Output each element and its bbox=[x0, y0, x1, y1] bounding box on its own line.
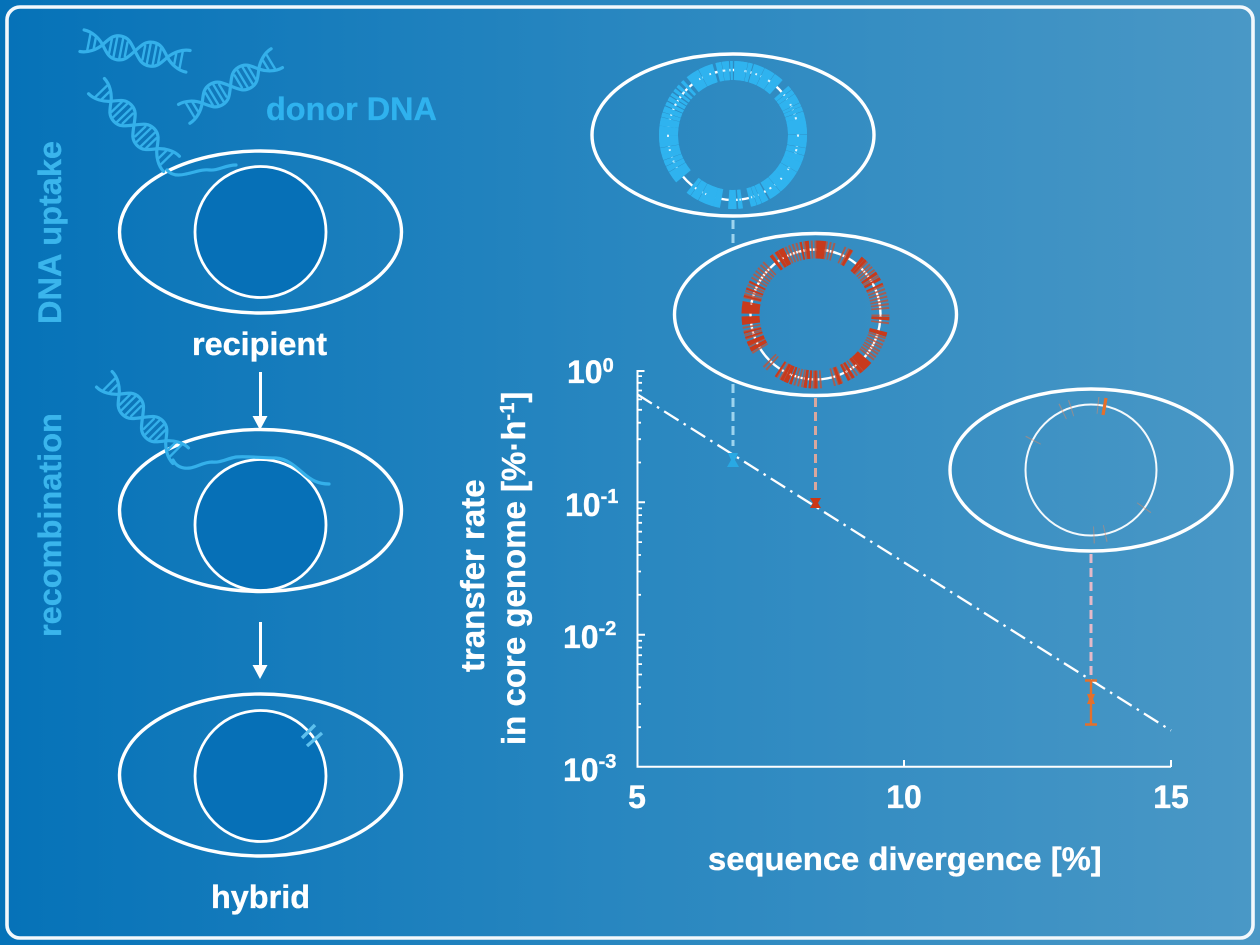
panel: hybrid stage bbox=[120, 694, 402, 915]
genome map: red, medium divergence bbox=[674, 234, 956, 396]
y-axis tick labels: 10 bbox=[563, 752, 599, 788]
genome map: blue, low divergence bbox=[592, 54, 874, 216]
y-axis tick labels: -2 bbox=[599, 618, 616, 640]
heading: donor DNA: donor DNA bbox=[266, 91, 437, 127]
y-axis tick labels: 0 bbox=[603, 355, 614, 377]
icon: donor DNA helix top bbox=[80, 29, 190, 73]
arrow: uptake to recombination bbox=[252, 372, 268, 430]
cell during recombination bbox=[120, 430, 402, 592]
panel: recombination stage bbox=[32, 371, 402, 637]
y-axis title: in core genome [%·h bbox=[495, 420, 532, 745]
hybrid cell bbox=[120, 694, 402, 856]
chart: transfer rate vs sequence divergence bbox=[454, 220, 1189, 877]
x-axis tick labels: 5 bbox=[628, 779, 646, 815]
y-axis title: ] bbox=[495, 392, 532, 403]
single-stranded DNA along chromosome bbox=[173, 457, 329, 484]
label: hybrid: hybrid bbox=[211, 879, 310, 915]
x-axis title: sequence divergence [%] bbox=[708, 840, 1102, 877]
y-axis title: -1 bbox=[497, 403, 519, 420]
y-axis tick labels: -3 bbox=[599, 751, 616, 773]
icon: DNA helix recombining bbox=[96, 371, 189, 464]
y-axis tick labels: -1 bbox=[601, 486, 618, 508]
y-axis tick labels: 10 bbox=[567, 354, 603, 390]
y-axis tick labels: 10 bbox=[563, 619, 599, 655]
label: recombination: recombination bbox=[32, 413, 68, 637]
y-axis title: transfer rate bbox=[454, 479, 491, 672]
label: recipient: recipient bbox=[192, 326, 327, 362]
recipient cell bbox=[120, 151, 402, 313]
drop lines to data points bbox=[733, 220, 1091, 678]
data point: blue bbox=[727, 453, 739, 467]
panel: DNA uptake stage bbox=[32, 29, 437, 362]
y-axis tick labels bbox=[563, 354, 618, 788]
y-axis title bbox=[454, 392, 532, 745]
icon: donor DNA helix right bbox=[178, 48, 283, 124]
genome map: orange, high divergence bbox=[950, 389, 1232, 551]
x-axis tick labels: 15 bbox=[1153, 779, 1189, 815]
integrated donor fragment bbox=[302, 725, 322, 746]
single-stranded donor DNA in cell bbox=[167, 165, 236, 175]
chart axes bbox=[637, 371, 1171, 767]
fit line bbox=[638, 394, 1171, 730]
data point: orange with error bars bbox=[1085, 680, 1097, 724]
data point: red bbox=[810, 498, 821, 508]
icon: donor DNA helix entering cell bbox=[88, 78, 180, 172]
label: DNA uptake: DNA uptake bbox=[32, 141, 68, 324]
arrow: recombination to hybrid bbox=[252, 622, 268, 679]
x-axis tick labels: 10 bbox=[886, 779, 922, 815]
x-axis tick labels bbox=[628, 779, 1189, 815]
y-axis tick labels: 10 bbox=[565, 487, 601, 523]
